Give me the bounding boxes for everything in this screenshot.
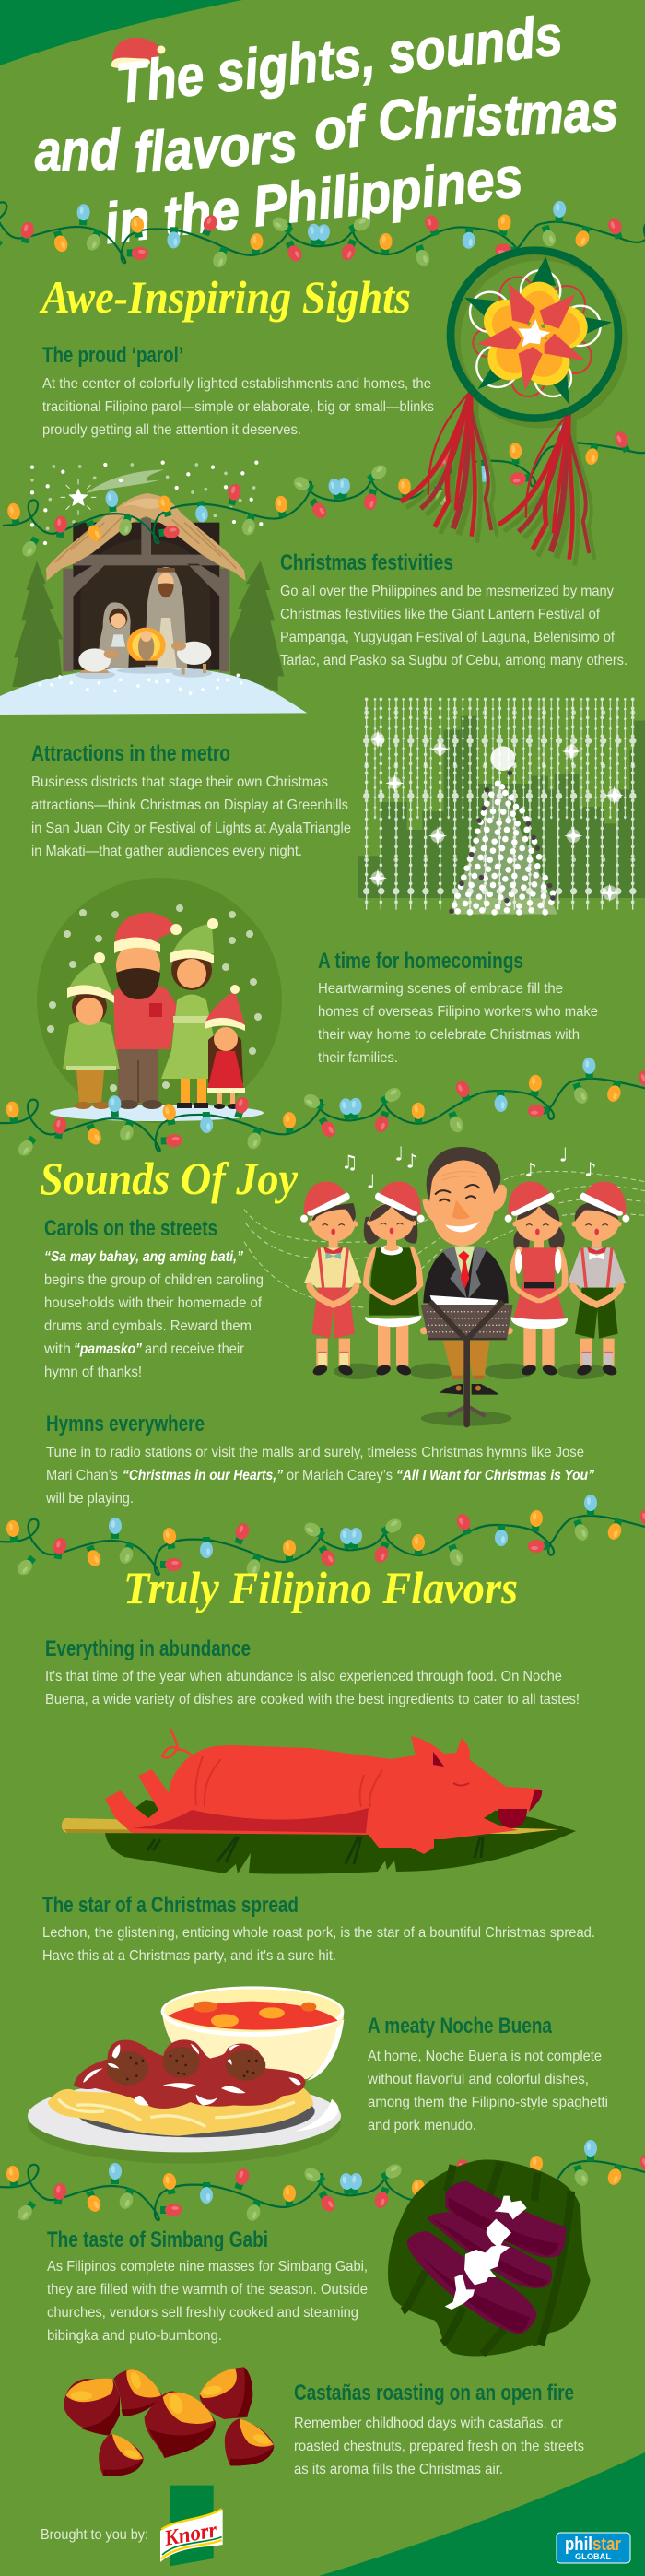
logo: Knorr [160,2486,223,2566]
boy singer 4 [568,1182,629,1377]
section: carols on the streets: “Sa may bahay, ang aming bati,” [44,1249,243,1265]
illustration: choir and conductor [244,1142,645,1426]
section: carols on the streets: “pamasko” [74,1341,142,1357]
garland: fifth string of lights [0,2140,645,2223]
section: a meaty Noche Buena: and pork menudo. [368,2118,476,2133]
section: hymns everywhere: will be playing. [45,1491,134,1507]
section: the proud parol: The proud ‘parol’ [42,343,183,368]
section: a time for homecomings: A time for homecomings [318,949,523,974]
section: a meaty Noche Buena: without flavorful and colorful dishes, [367,2072,589,2087]
section: hymns everywhere: “Christmas in our Hearts,” [123,1468,283,1483]
section: attractions in the metro: Business districts that stage their own Christmas [31,774,328,790]
illustration: festival of lights [358,699,645,915]
section: Christmas festivities: Christmas festivities like the Giant Lantern Festival of [280,607,601,622]
section: attractions in the metro: attractions—think Christmas on Display at Greenhills [31,798,348,813]
section: hymns everywhere [45,1412,594,1507]
bottom-right dark green corner [319,2452,645,2576]
section: a meaty Noche Buena: A meaty Noche Buena [368,2014,553,2038]
girl singer 2 [364,1182,425,1377]
illustration: family in the snow [37,878,282,1123]
section: a meaty Noche Buena: among them the Filipino-style spaghetti [368,2095,608,2110]
title [34,4,619,256]
section: the taste of Simbang Gabi: As Filipinos complete nine masses for Simbang Gabi, [47,2259,368,2275]
section: carols on the streets: and receive their [145,1341,245,1357]
garland: second string of lights [0,413,645,561]
section: Christmas festivities [280,550,627,668]
section: a meaty Noche Buena: At home, Noche Buena is not complete [368,2049,602,2064]
section: a time for homecomings: their families. [318,1050,398,1066]
title: of [311,94,371,163]
illustration: nativity scene [0,493,307,715]
music notes: ♪ [584,1158,596,1180]
section: the star of a Christmas spread: The star of a Christmas spread [42,1893,299,1918]
boy [63,952,120,1109]
section: the taste of Simbang Gabi: bibingka and puto-bumbong. [47,2328,222,2344]
section: hymns everywhere: or Mariah Carey’s [287,1468,393,1483]
section: carols on the streets: households with their homemade of [44,1295,263,1311]
girl singer 3 [505,1182,568,1377]
section: attractions in the metro: in San Juan City or Festival of Lights at AyalaTriangle [31,821,351,836]
garland: third string of lights [0,1055,645,1159]
section: carols on the streets: hymn of thanks! [44,1365,142,1380]
section: castanas roasting on an open fire: as its aroma fills the Christmas air. [294,2462,503,2477]
father [113,913,182,1109]
boy singer 1 [300,1182,362,1377]
section: everything in abundance: Everything in abundance [45,1637,251,1661]
section: Christmas festivities: Pampanga, Yugyugan Festival of Laguna, Belenisimo of [280,630,615,645]
section: carols on the streets [43,1216,264,1380]
section: the proud parol: proudly getting all the attention it deserves. [42,422,301,438]
music notes [341,1142,596,1192]
section: carols on the streets: with [43,1341,71,1357]
section: the proud parol: traditional Filipino parol—simple or elaborate, big or small—blinks [42,399,434,415]
illustration: soup bowl and spaghetti plate [28,1986,344,2164]
logo: philstar global: GLOBAL [575,2552,611,2562]
title: flavors [132,111,299,185]
section: the proud parol [42,343,434,438]
section: Christmas festivities: Christmas festivities [280,550,453,575]
section: the taste of Simbang Gabi [47,2227,368,2344]
section: the taste of Simbang Gabi: The taste of Simbang Gabi [47,2227,268,2252]
section: Christmas festivities: Go all over the Philippines and be mesmerized by many [280,584,614,599]
conductor [420,1147,513,1424]
music notes: ♪ [406,1151,418,1173]
music notes: ♩ [367,1170,376,1192]
section: carols on the streets: Carols on the streets [44,1216,217,1241]
section: the taste of Simbang Gabi: churches, vendors sell freshly cooked and steaming [47,2305,358,2321]
icon: santa hat on the title [111,38,166,68]
top-left dark green corner [0,0,242,65]
garland: first string of lights [0,176,645,289]
section: everything in abundance: It's that time of the year when abundance is also experienced through food. On Noche [45,1669,562,1684]
title: and [34,118,121,183]
music notes: ♩ [394,1142,404,1164]
brought to you by label: Brought to you by: [41,2527,148,2543]
section: carols on the streets: begins the group of children caroling [44,1272,264,1288]
illustration: parol lantern [401,251,625,565]
section: carols on the streets: drums and cymbals. Reward them [44,1318,252,1334]
music notes: ♩ [559,1143,569,1165]
mother [161,918,227,1108]
section: hymns everywhere: Tune in to radio stations or visit the malls and surely, timeless Christmas hymns like Jose [46,1445,584,1460]
section: hymns everywhere: “All I Want for Christmas is You” [396,1468,594,1483]
illustration: shooting star and sparkles [32,463,261,543]
section: everything in abundance [45,1637,580,1707]
logo: philstar global [557,2533,630,2563]
section: castanas roasting on an open fire [294,2381,584,2477]
section: the taste of Simbang Gabi: they are filled with the warmth of the season. Outside [47,2282,368,2298]
garland: fourth string of lights [0,1495,645,1578]
heading: Sounds of Joy: Sounds Of Joy [40,1152,299,1204]
section: castanas roasting on an open fire: Remember childhood days with castañas, or [294,2416,564,2431]
heading: Truly Filipino Flavors: Truly Filipino Flavors [123,1562,518,1613]
illustration: roasted chestnuts [64,2367,274,2476]
section: attractions in the metro: Attractions in the metro [31,741,230,766]
music staff lines [244,1171,645,1307]
section: a time for homecomings [318,949,598,1066]
section: attractions in the metro: in Makati—that gather audiences every night. [31,844,302,859]
title: in the Philippines [101,146,526,256]
section: a time for homecomings: their way home to celebrate Christmas with [318,1027,580,1043]
heading: Awe-Inspiring Sights: Awe-Inspiring Sights [39,271,411,323]
illustration: lechon roast pig on banana leaf [62,1729,576,1874]
section: a meaty Noche Buena [367,2014,608,2133]
section: the star of a Christmas spread: Lechon, the glistening, enticing whole roast pork, is the star of a bountiful Christmas spread. [42,1925,595,1941]
section: the proud parol: At the center of colorfully lighted establishments and homes, the [42,376,431,392]
section: a time for homecomings: Heartwarming scenes of embrace fill the [318,981,563,997]
logo: Knorr: Knorr [162,2518,219,2551]
section: attractions in the metro [31,741,351,859]
section: a time for homecomings: homes of overseas Filipino workers who make [318,1004,598,1020]
section: the star of a Christmas spread: Have this at a Christmas party, and it's a sure hit. [42,1948,336,1964]
section: hymns everywhere: Mari Chan’s [46,1468,118,1483]
section: hymns everywhere: Hymns everywhere [46,1412,205,1436]
logo: philstar global: star [592,2535,621,2555]
music notes: ♫ [341,1151,358,1173]
logo: philstar global: phil [565,2535,592,2555]
section: castanas roasting on an open fire: roasted chestnuts, prepared fresh on the streets [294,2439,584,2454]
music notes: ♪ [524,1159,537,1181]
section: everything in abundance: Buena, a wide variety of dishes are cooked with the best ingredients to cater to all tastes! [45,1692,580,1707]
section: castanas roasting on an open fire: Castañas roasting on an open fire [294,2381,574,2405]
illustration: puto-bumbong on leaf [388,2159,591,2356]
girl [205,985,245,1109]
section: the star of a Christmas spread [42,1893,595,1964]
